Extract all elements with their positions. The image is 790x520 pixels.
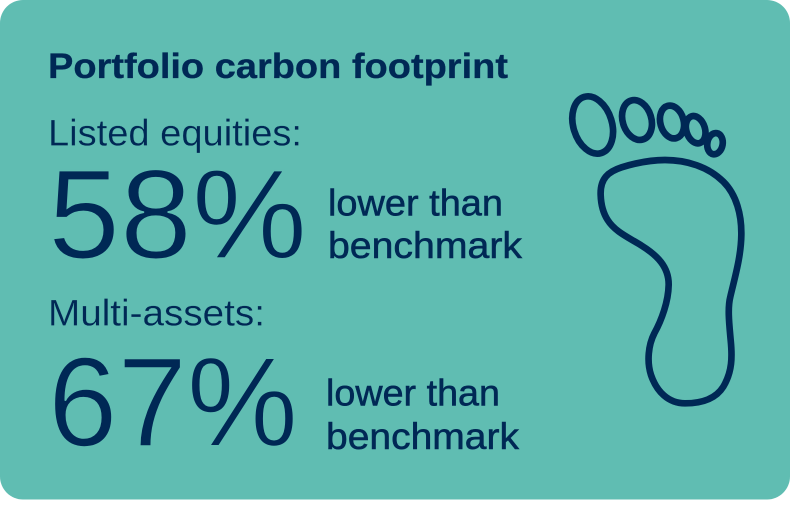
caption: lower than benchmark: benchmark bbox=[326, 416, 520, 457]
block: multi-assets bbox=[48, 292, 520, 473]
icon part: toes bbox=[566, 91, 724, 159]
stat: 58%: 58% bbox=[48, 143, 307, 285]
caption: lower than benchmark: benchmark bbox=[328, 225, 523, 266]
caption: lower than benchmark bbox=[328, 182, 523, 266]
label: listed equities: Listed equities: bbox=[48, 112, 302, 154]
caption: lower than benchmark bbox=[326, 372, 520, 457]
icon part: sole of foot bbox=[601, 160, 741, 403]
block: listed equities bbox=[48, 112, 523, 285]
stat: 67%: 67% bbox=[48, 331, 298, 473]
caption: lower than benchmark: lower than bbox=[326, 372, 500, 414]
caption: lower than benchmark: lower than bbox=[328, 182, 503, 224]
label: multi-assets: Multi-assets: bbox=[48, 292, 265, 334]
title: Portfolio carbon footprint bbox=[48, 47, 508, 86]
icon: footprint bbox=[566, 91, 741, 403]
